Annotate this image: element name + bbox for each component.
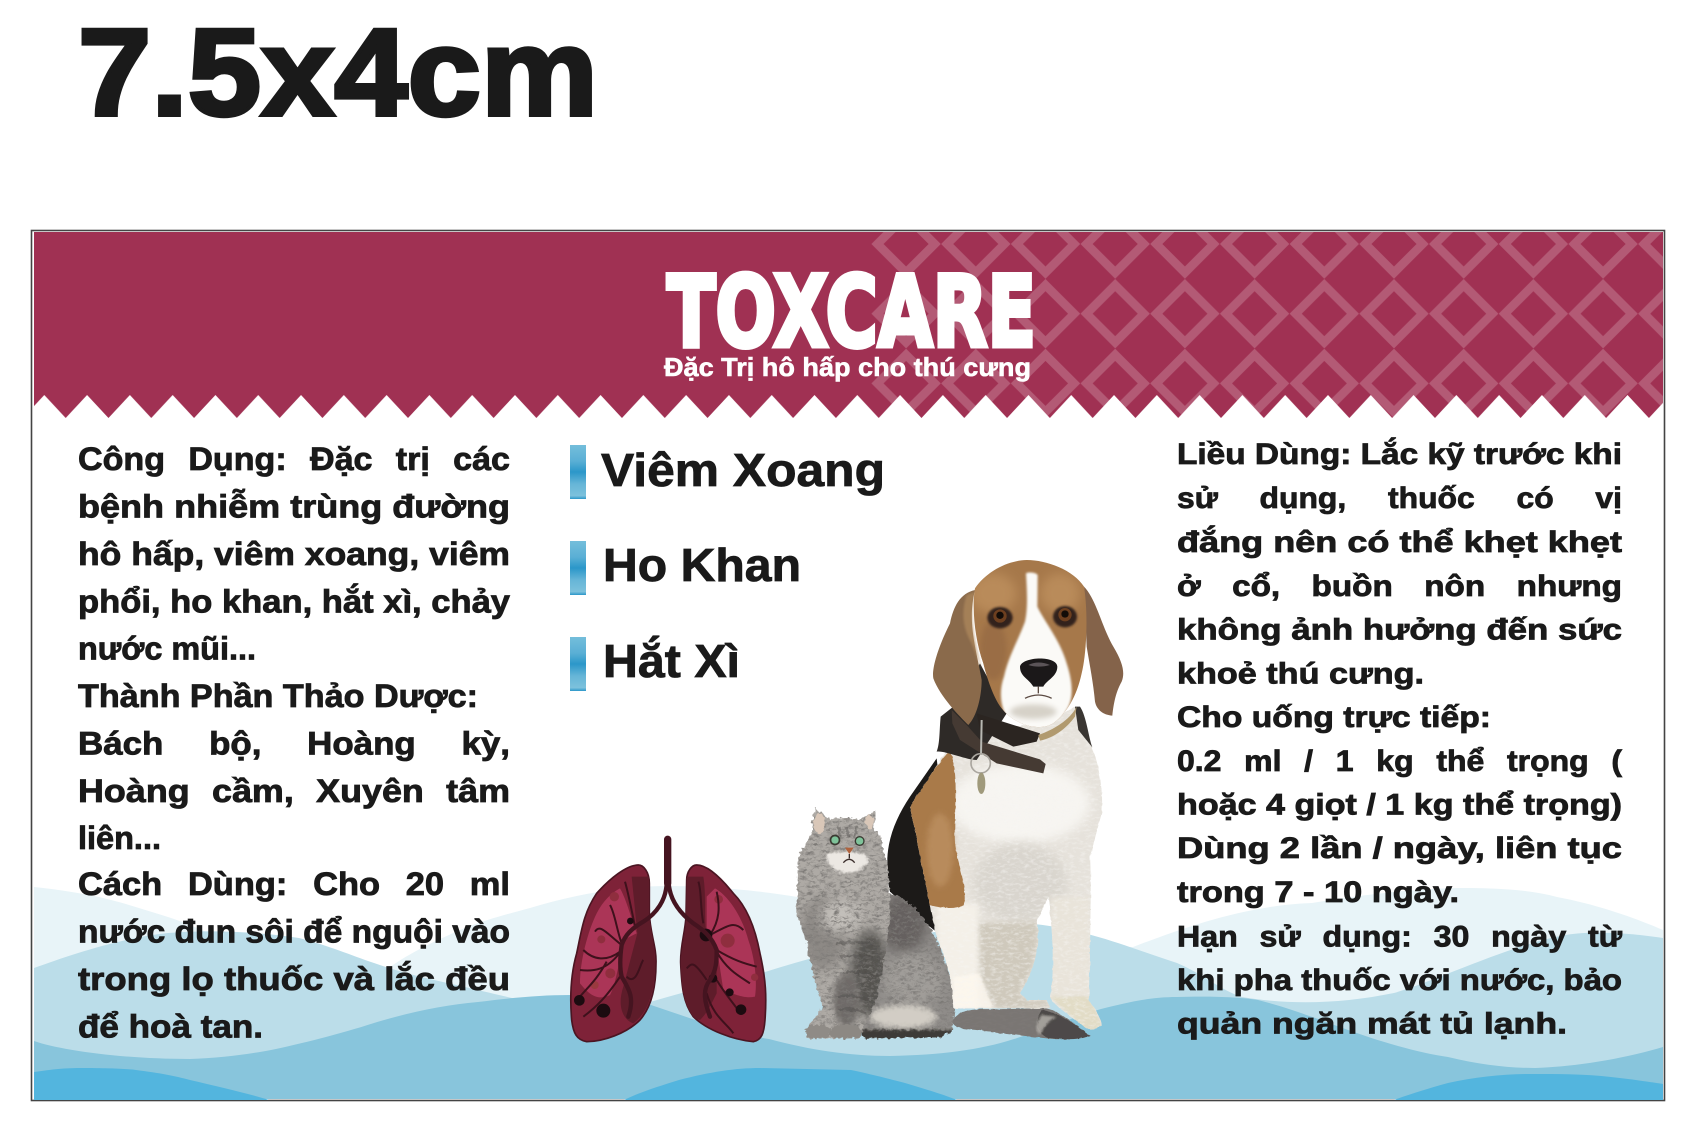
right text block: khoẻ thú cưng.: [1177, 657, 1424, 690]
left text block: bệnh nhiễm trùng đường: [78, 488, 510, 524]
cat body: [793, 807, 893, 1043]
right text block: Cho uống trực tiếp:: [1177, 701, 1491, 734]
header band: [34, 232, 1663, 418]
symptom list: [570, 444, 885, 691]
dog collar: [952, 707, 1077, 794]
photo: dog and cat: [793, 557, 1123, 1043]
right text block: trong 7 - 10 ngày.: [1177, 876, 1459, 909]
left text block: nước đun sôi để nguội vào: [78, 914, 510, 950]
symptom: Hắt Xì: Hắt Xì: [603, 635, 740, 687]
dog head: [974, 560, 1086, 728]
symptom: Ho Khan: Ho Khan: [603, 539, 801, 591]
dog neck: [937, 663, 1007, 760]
left text block: Công Dụng: Đặc trị các: [78, 441, 510, 477]
left text block: liên...: [78, 820, 161, 856]
left text block: Thành Phần Thảo Dược:: [78, 678, 478, 714]
dog ears: [933, 590, 982, 725]
brand name: TOXCARE: [667, 256, 1036, 370]
right text block: khi pha thuốc với nước, bảo: [1177, 964, 1622, 997]
dog body: [903, 703, 1107, 1033]
label panel: [32, 230, 1664, 1100]
right text block: ở cổ, buồn nôn nhưng: [1177, 570, 1622, 603]
right text block: 0.2 ml / 1 kg thể trọng (: [1177, 745, 1622, 778]
cat face: [830, 835, 865, 863]
left text block: Cách Dùng: Cho 20 ml: [78, 866, 510, 902]
left text block: hô hấp, viêm xoang, viêm: [78, 536, 510, 572]
left text block: Bách bộ, Hoàng kỳ,: [78, 726, 510, 762]
right lung: [681, 865, 766, 1042]
right text block: Hạn sử dụng: 30 ngày từ: [1177, 920, 1622, 954]
left text block: nước mũi...: [78, 630, 256, 666]
brand tagline: Đặc Trị hô hấp cho thú cưng: [664, 352, 1031, 382]
cat haunch: [862, 893, 956, 1040]
right text block: đắng nên có thể khẹt khẹt: [1177, 525, 1622, 559]
right text block: không ảnh hưởng đến sức: [1177, 614, 1622, 647]
left text block: trong lọ thuốc và lắc đều: [78, 961, 510, 997]
wave background: [34, 886, 1663, 1100]
icon: lungs: [571, 839, 766, 1042]
right text block: [1177, 437, 1622, 1040]
trachea and bronchi: [620, 839, 717, 1017]
left lung: [571, 865, 656, 1042]
left text block: phổi, ho khan, hắt xì, chảy: [78, 584, 510, 620]
right text block: hoặc 4 giọt / 1 kg thể trọng): [1177, 788, 1622, 822]
cat tail: [952, 1008, 1090, 1040]
left text block: Hoàng cầm, Xuyên tâm: [78, 773, 510, 809]
right text block: sử dụng, thuốc có vị: [1177, 482, 1622, 515]
left text block: [78, 441, 510, 1044]
right text block: Liều Dùng: Lắc kỹ trước khi: [1177, 437, 1622, 471]
right text block: quản ngăn mát tủ lạnh.: [1177, 1008, 1567, 1040]
dog back: [887, 758, 943, 937]
left text block: để hoà tan.: [78, 1008, 263, 1044]
right text block: Dùng 2 lần / ngày, liên tục: [1177, 832, 1622, 865]
symptom: Viêm Xoang: Viêm Xoang: [601, 444, 885, 496]
size title: 7.5x4cm: [78, 4, 598, 142]
